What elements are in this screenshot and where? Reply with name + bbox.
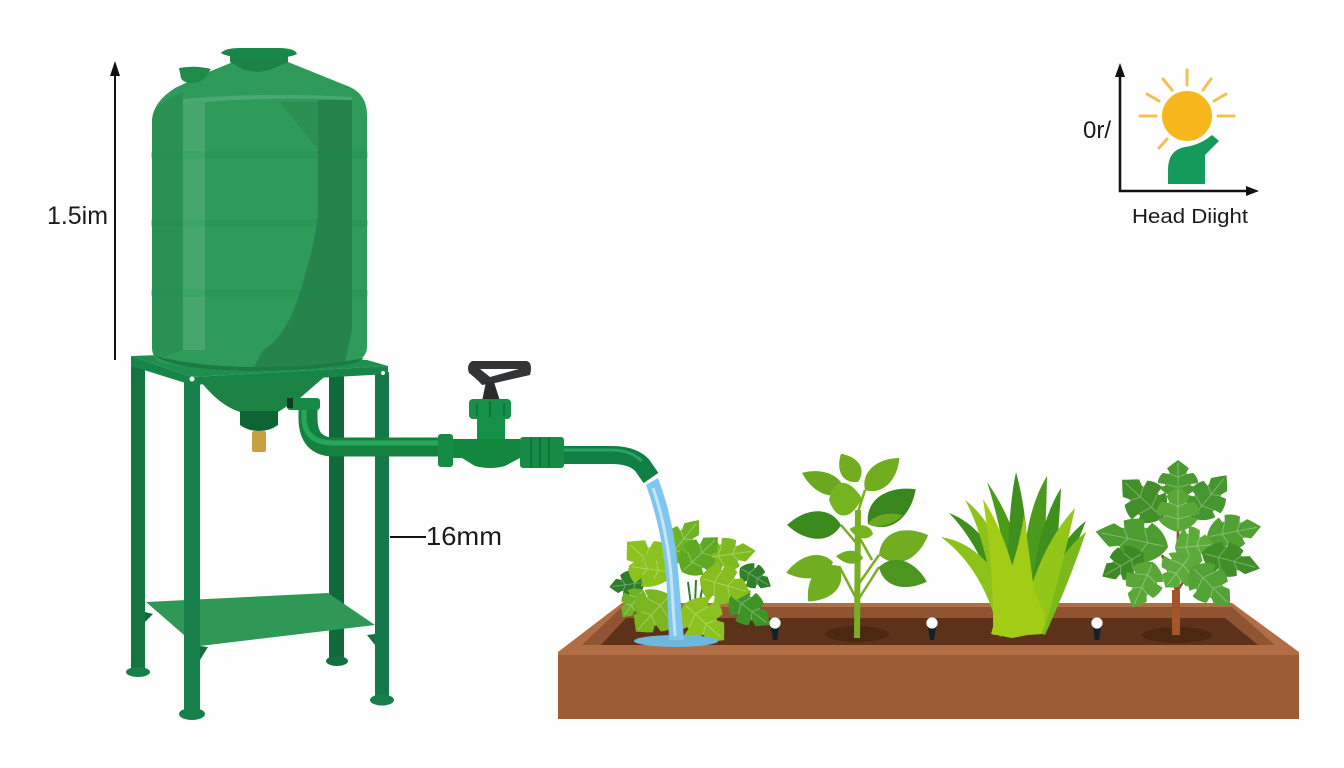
plant 2: broadleaf seedling: [784, 448, 934, 638]
height arrow: [110, 61, 120, 360]
pipe union: [520, 437, 564, 468]
tank shaded right panel: [253, 100, 352, 369]
chart y label: 0r/: [1083, 117, 1111, 144]
stand: [126, 355, 394, 720]
tank lid: [221, 48, 297, 72]
lower shelf: [146, 593, 375, 646]
planter inner wall: [582, 607, 1275, 645]
height label: 1.5im: [47, 202, 108, 230]
tank ribs: [151, 155, 368, 293]
sun: [1140, 70, 1234, 148]
drip emitters: [770, 618, 1102, 640]
plant 3: grass clump: [941, 472, 1086, 638]
tank shoulder shade: [280, 102, 318, 150]
tank highlight strip: [183, 95, 352, 350]
pipe diameter label: [390, 521, 502, 551]
plant 1: monstera: [607, 509, 780, 658]
valve handle: [468, 361, 531, 401]
front legs: [179, 372, 394, 720]
plant 4: young tree: [1091, 460, 1264, 635]
feed pipe: [287, 398, 440, 447]
pipe diameter label: 16mm: [426, 521, 502, 551]
chart axes: [1115, 63, 1259, 196]
water stream: [634, 478, 718, 647]
chart x label: Head Diight: [1132, 206, 1248, 228]
tank funnel outlet: [198, 372, 330, 452]
soil mounds: [825, 626, 1212, 643]
back legs: [126, 362, 348, 677]
planter rim: [558, 603, 1299, 655]
inlet cup: [179, 67, 211, 83]
plant silhouette: [1168, 135, 1219, 184]
soil: [601, 618, 1258, 645]
outlet pipe: [564, 450, 651, 478]
pool: [634, 635, 718, 647]
planter front: [558, 653, 1299, 719]
tank base lip: [155, 356, 364, 371]
sunlight chart icon: [1083, 63, 1259, 228]
raised planter bed: [558, 603, 1299, 719]
tank left shade: [152, 92, 183, 358]
top plate: [131, 355, 388, 377]
valve: [438, 361, 564, 468]
valve body: [438, 399, 520, 468]
water tank: [151, 48, 368, 371]
